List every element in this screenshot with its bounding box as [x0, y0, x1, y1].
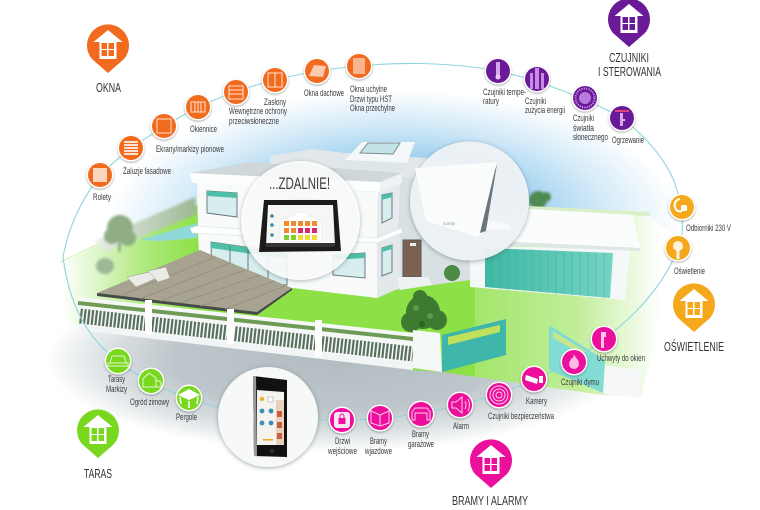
item: Ekrany/markizy pionowe: [150, 112, 224, 154]
item: Czujniki zużycia energii: Czujniki: [525, 96, 546, 106]
item: Bramy wjazdowe: Bramy: [370, 436, 387, 446]
item: Tarasy, Markizy: Tarasy: [108, 374, 125, 384]
tree behind garage: [529, 191, 551, 209]
item: Czujniki światła słonecznego: światła: [573, 123, 594, 133]
garage: [470, 209, 640, 300]
category pin: OKNA: OKNA: [96, 81, 121, 95]
back tree: [104, 215, 136, 252]
item: Oświetlenie: [664, 234, 705, 276]
item: Kamery: Kamery: [526, 396, 547, 406]
pool: [140, 223, 197, 241]
front door: [397, 240, 432, 290]
item: Ogród zimowy: Ogród zimowy: [130, 397, 169, 407]
lawn left fade: [55, 203, 200, 350]
item: Czujniki temperatury: [483, 58, 526, 106]
tablet: [259, 200, 341, 252]
item: Oświetlenie: Oświetlenie: [674, 266, 705, 276]
item: Czujniki bezpieczeństwa: Czujniki bezpieczeństwa: [488, 411, 554, 421]
item: Wewnętrzne ochrony przeciwsłoneczne: [222, 78, 287, 126]
item: Czujniki dymu: [560, 348, 599, 387]
gate post: [413, 330, 442, 372]
item: Czujniki światła słonecznego: [572, 84, 608, 142]
right gate: [549, 325, 605, 393]
item: Czujniki bezpieczeństwa: [486, 382, 554, 421]
item: Tarasy, Markizy: [104, 348, 132, 394]
item: Czujniki dymu: Czujniki dymu: [561, 377, 599, 387]
bush in front of gate: [401, 290, 447, 332]
item: Czujniki zużycia energii: zużycia energii: [525, 105, 565, 115]
item: Pergole: Pergole: [176, 412, 197, 422]
item: Okna uchylne, Drzwi typu HST, Okna przechylne: Okna przechylne: [350, 103, 395, 113]
item: Wewnętrzne ochrony przeciwsłoneczne: Wewnętrzne ochrony: [229, 106, 287, 116]
back hedge: [95, 197, 197, 252]
item: Kamery: [520, 366, 548, 406]
item: Czujniki światła słonecznego: Czujniki: [573, 113, 594, 123]
category pin: BRAMY I ALARMY: [452, 439, 528, 508]
item: Żaluzje fasadowe: Żaluzje fasadowe: [123, 166, 171, 176]
category pin: OŚWIETLENIE: [664, 283, 724, 354]
item: Okna uchylne, Drzwi typu HST, Okna przechylne: Drzwi typu HST: [350, 94, 392, 104]
item: Zasłony: Zasłony: [264, 97, 286, 107]
item: Okna dachowe: Okna dachowe: [304, 88, 344, 98]
item: Bramy garażowe: [408, 400, 434, 449]
item: Okna uchylne, Drzwi typu HST, Okna przechylne: [346, 52, 395, 113]
magnifier: control box: [410, 142, 529, 260]
item: Odbiorniki 230 V: Odbiorniki 230 V: [686, 223, 731, 233]
road: [30, 296, 670, 470]
lawn: [60, 205, 680, 400]
item: Bramy wjazdowe: wjazdowe: [364, 446, 392, 456]
item: Bramy garażowe: garażowe: [408, 439, 434, 449]
lower storey: [190, 226, 402, 298]
item: Rolety: [86, 162, 114, 202]
item: Drzwi wejściowe: Drzwi: [335, 436, 350, 446]
sun loungers: [127, 267, 170, 287]
item: Tarasy, Markizy: Markizy: [106, 384, 127, 394]
category pin: OKNA: [87, 24, 129, 95]
control device: somfy: [443, 221, 456, 226]
left gate: [442, 319, 506, 372]
smartphone: [253, 376, 287, 457]
category pin: BRAMY I ALARMY: BRAMY I ALARMY: [452, 494, 528, 508]
skylight block: [345, 142, 415, 172]
item: Ogrzewanie: Ogrzewanie: [612, 135, 644, 145]
small back bush: [96, 258, 114, 274]
back light fence strip: [528, 206, 650, 216]
item: Żaluzje fasadowe: [118, 134, 171, 176]
item: Ogród zimowy: [130, 368, 169, 407]
category pin: CZUJNIKI I STEROWANIA: I STEROWANIA: [598, 65, 661, 79]
item: Odbiorniki 230 V: [668, 194, 731, 233]
item: Drzwi wejściowe: [327, 406, 357, 456]
item: Okiennice: Okiennice: [190, 124, 217, 134]
item: Okna dachowe: [304, 58, 344, 98]
item: Czujniki temperatury: ratury: [483, 96, 499, 106]
magnifier: smartphone: [218, 367, 318, 467]
category pin: CZUJNIKI I STEROWANIA: [598, 0, 661, 79]
item: Uchwyty do okien: [590, 326, 645, 363]
house scene: [30, 142, 682, 470]
connecting loop line: [63, 63, 682, 420]
item: Okiennice: [184, 94, 217, 134]
item: Bramy wjazdowe: [364, 404, 394, 456]
item: Ekrany/markizy pionowe: Ekrany/markizy pionowe: [156, 144, 224, 154]
sky: [110, 90, 680, 350]
category pin: CZUJNIKI I STEROWANIA: CZUJNIKI: [609, 51, 649, 65]
back wing of house: [395, 175, 470, 290]
item: Bramy garażowe: Bramy: [412, 429, 429, 439]
item: Czujniki temperatury: Czujniki tempe-: [483, 87, 526, 97]
item: Drzwi wejściowe: wejściowe: [327, 446, 357, 456]
wooden deck: [97, 250, 292, 315]
item: Zasłony: [262, 66, 288, 107]
item: Rolety: Rolety: [93, 192, 111, 202]
upper storey: [190, 162, 402, 240]
item: Ogrzewanie: [608, 104, 644, 145]
item: Wewnętrzne ochrony przeciwsłoneczne: przeciwsłoneczne: [229, 116, 279, 126]
item: Alarm: Alarm: [453, 421, 469, 431]
item: Czujniki światła słonecznego: słonecznego: [573, 132, 608, 142]
item: Okna uchylne, Drzwi typu HST, Okna przechylne: Okna uchylne: [350, 84, 387, 94]
item: Uchwyty do okien: Uchwyty do okien: [597, 353, 645, 363]
small bush by door: [444, 265, 460, 281]
item: Pergole: [176, 384, 202, 422]
right gate post: [603, 365, 640, 398]
fence: [78, 297, 413, 370]
category pin: TARAS: [77, 409, 119, 481]
category pin: OŚWIETLENIE: OŚWIETLENIE: [664, 339, 724, 354]
heading: ...ZDALNIE!: ...ZDALNIE!: [269, 174, 330, 193]
magnifier: ...ZDALNIE! with tablet: [241, 161, 360, 280]
category pin: TARAS: TARAS: [84, 467, 112, 481]
lawn right fade: [475, 208, 682, 402]
item: Alarm: [446, 392, 474, 431]
item: Czujniki zużycia energii: [524, 66, 565, 115]
